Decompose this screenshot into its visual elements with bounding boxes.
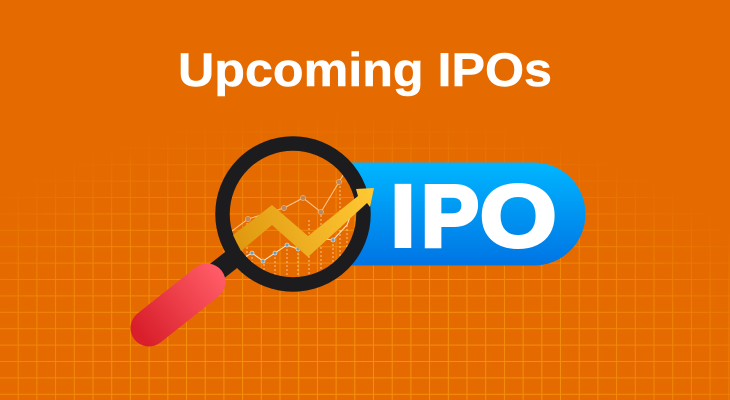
IPO label: O	[480, 167, 556, 265]
IPO badge	[340, 162, 586, 266]
chart drop lines	[246, 186, 348, 275]
trend arrow	[233, 188, 374, 257]
handle grip	[149, 282, 207, 328]
lower chart line	[246, 218, 350, 264]
IPO label: I	[391, 168, 415, 265]
IPO label	[391, 167, 556, 265]
title: Upcoming IPOs	[178, 43, 552, 96]
handle neck	[212, 253, 240, 275]
upper chart line	[232, 174, 344, 232]
IPO label: P	[421, 168, 479, 265]
lens ring	[222, 144, 364, 284]
line chart inside lens	[232, 174, 350, 275]
magnifying glass	[149, 144, 364, 328]
blue pill	[340, 162, 586, 266]
background grid	[0, 138, 730, 400]
